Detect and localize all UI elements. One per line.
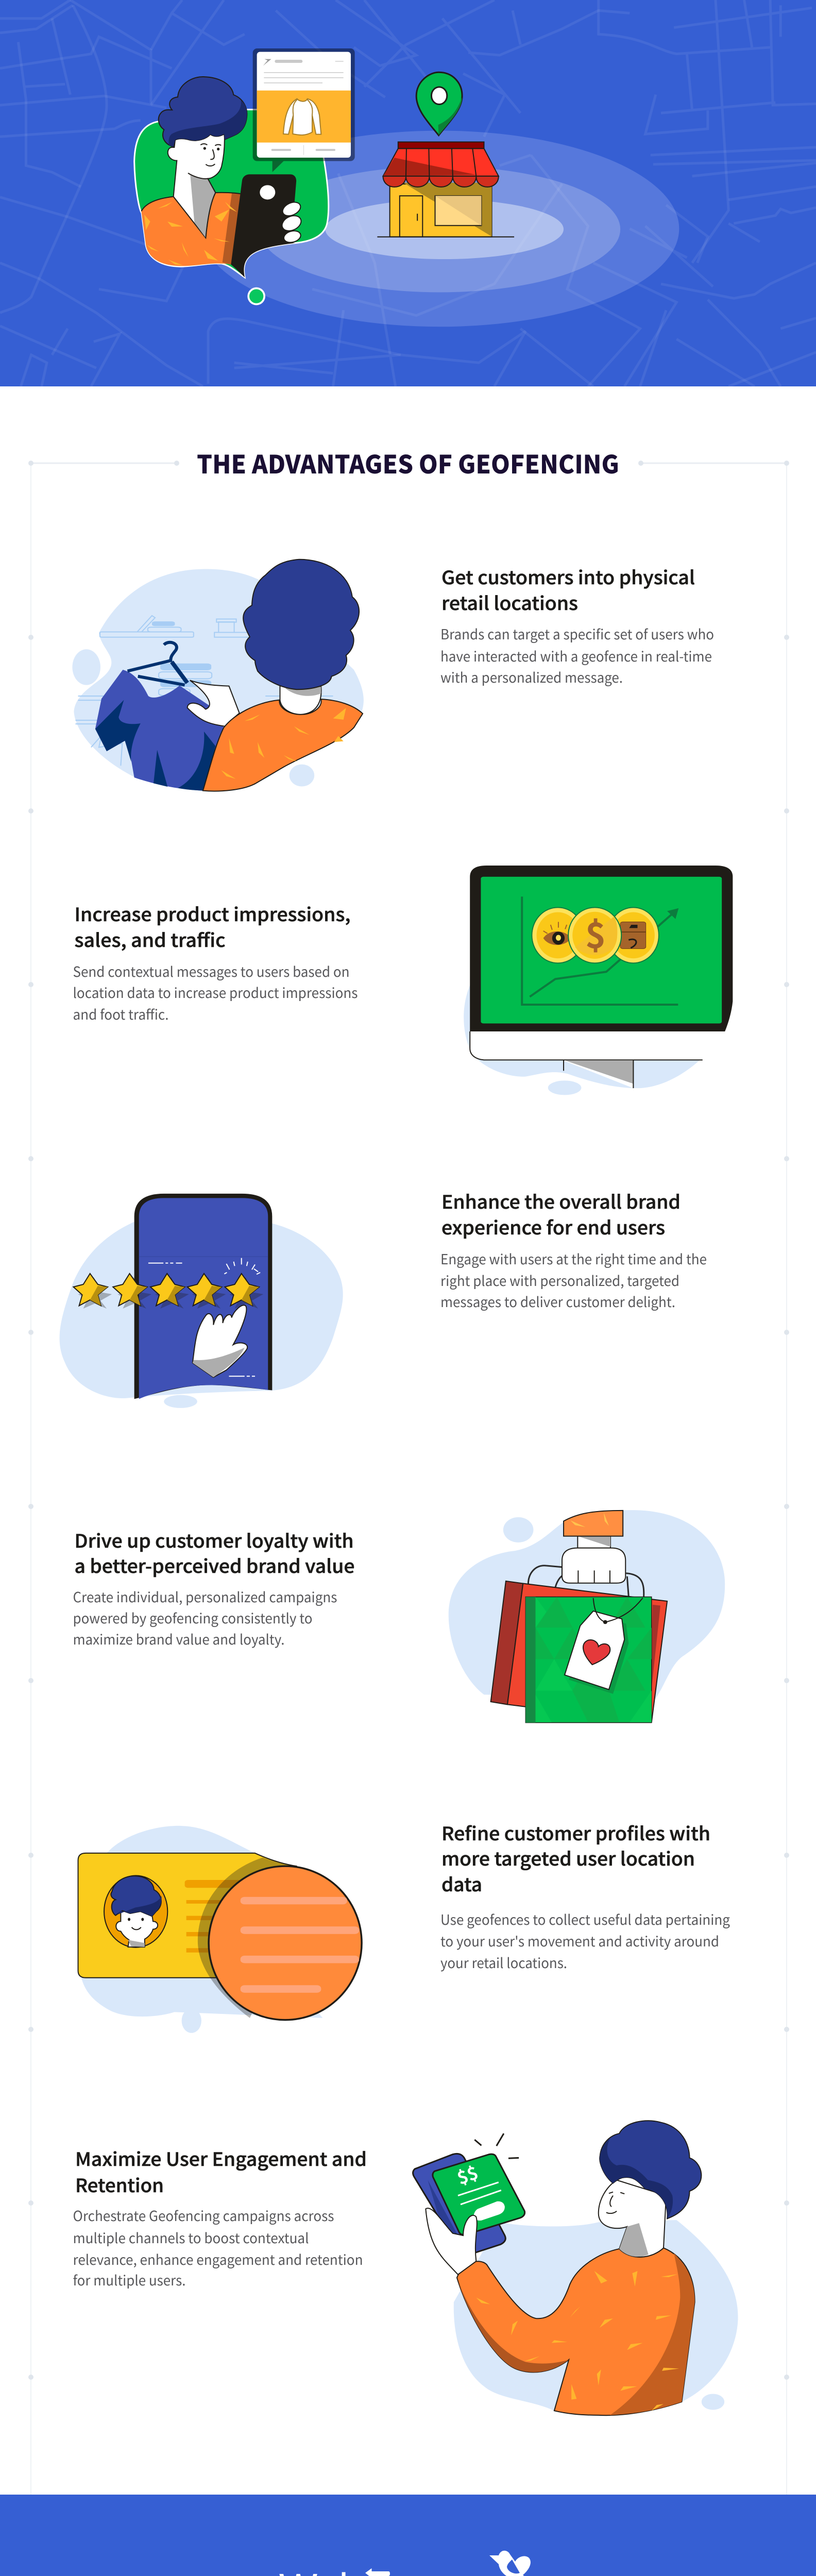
text block: section 3: messages to deliver customer delight. <box>440 1291 675 1311</box>
text block: section 4: a better-perceived brand value <box>74 1552 354 1579</box>
hand holding hanger <box>188 680 240 726</box>
text block: section 6: relevance, enhance engagement and retention <box>73 2249 363 2269</box>
magnifier <box>198 1857 362 2020</box>
icon: location dot <box>247 287 265 305</box>
illustration: person in speech bubble with message card <box>134 48 355 305</box>
text block: section 2: location data to increase product impressions <box>73 982 358 1002</box>
shirt <box>141 193 241 266</box>
monitor body <box>470 866 733 1088</box>
id card <box>78 1853 297 1978</box>
alert ticks <box>474 2133 519 2158</box>
text block: section 4: Drive up customer loyalty with <box>74 1527 353 1553</box>
text block: section 5 <box>440 1819 730 1972</box>
phone in hand <box>231 174 303 277</box>
illustration: store <box>377 142 514 237</box>
text block: section 6: multiple channels to boost contextual <box>73 2227 309 2247</box>
pointing hand <box>193 1305 247 1377</box>
background blob <box>454 2220 738 2411</box>
text block: section 3: experience for end users <box>441 1213 665 1240</box>
neck and face <box>599 2180 666 2257</box>
text block: section 1: Get customers into physical <box>441 563 695 590</box>
text block: section 6: for multiple users. <box>73 2269 185 2290</box>
text block: section 3: Engage with users at the right time and the <box>440 1248 707 1268</box>
hanging shirt <box>95 642 224 791</box>
panel: section 4 illustration shopping bags <box>449 1510 725 1723</box>
dollar label on phone: $$ <box>453 2159 481 2190</box>
text block: section 1: retail locations <box>441 589 578 616</box>
text block: section 4: powered by geofencing consistently to <box>73 1607 312 1628</box>
icon: long-sleeve top <box>283 99 321 135</box>
green bubble <box>134 109 329 277</box>
orange back <box>203 699 363 791</box>
text block: section 5: your retail locations. <box>440 1952 567 1972</box>
text block: section 2: Send contextual messages to users based on <box>73 961 349 981</box>
coin: dollar <box>568 907 621 963</box>
coins <box>532 907 659 963</box>
neck and face <box>168 134 225 238</box>
panel: section 3 illustration rating phone <box>60 1194 343 1408</box>
heart tag <box>565 1598 643 1694</box>
text block: section 3: right place with personalized, targeted <box>440 1270 679 1290</box>
panel frame with connector nodes <box>28 461 789 2495</box>
text block: section 1: Brands can target a specific set of users who <box>440 623 714 643</box>
five stars <box>73 1274 259 1306</box>
illustration: geofence scene with store <box>0 0 816 386</box>
icon: logo bird <box>489 2551 533 2576</box>
text block: section 1 <box>440 563 714 687</box>
text block: section 1: have interacted with a geofence in real-time <box>440 646 712 666</box>
icon: map pin <box>416 72 462 135</box>
panel: section 1 illustration shopper <box>72 560 364 791</box>
phone <box>134 1194 272 1399</box>
background blob <box>60 1208 343 1408</box>
message card mockup <box>253 48 355 172</box>
text block: section 2 <box>73 900 358 1024</box>
text block: section 5: Use geofences to collect useful data pertaining <box>440 1909 730 1929</box>
logo <box>279 2551 533 2576</box>
text block: section 1: with a personalized message. <box>440 667 623 687</box>
neck <box>280 686 321 715</box>
panel: section 5 illustration id card and magnifier <box>78 1826 362 2033</box>
handles <box>528 1566 644 1597</box>
text block: section 3 <box>440 1188 707 1311</box>
text block: section 2: and foot traffic. <box>73 1004 169 1024</box>
background blob <box>72 569 364 791</box>
panel: section 2 illustration monitor <box>464 866 733 1095</box>
geofence rings <box>200 131 679 327</box>
coin: box <box>608 907 659 963</box>
hand and sleeve <box>562 1511 625 1583</box>
text block: section 5: Refine customer profiles with <box>441 1819 710 1846</box>
background blob <box>81 1826 322 2033</box>
panel: footer <box>0 2495 816 2576</box>
panel: section 6 illustration person with phone <box>413 2121 738 2415</box>
sparkle <box>224 1258 260 1274</box>
text block: section 6 <box>73 2145 367 2290</box>
text block: section 5: data <box>441 1870 482 1897</box>
hand <box>426 2208 477 2275</box>
text block: section 6: Maximize User Engagement and <box>75 2145 367 2172</box>
panel: header hero <box>0 0 816 386</box>
text block: section 3: Enhance the overall brand <box>441 1188 681 1214</box>
icon: logo arrows <box>365 2568 390 2576</box>
title: THE ADVANTAGES OF GEOFENCING <box>197 445 619 481</box>
background blob <box>449 1510 725 1699</box>
icon label: dollar sign: $ <box>585 907 606 958</box>
text block: section 5: to your user's movement and activity around <box>440 1930 719 1951</box>
rising line chart <box>522 896 678 1005</box>
text block: section 4: maximize brand value and loyalty. <box>73 1629 284 1649</box>
text block: section 2: Increase product impressions, <box>74 900 350 927</box>
text block: section 6: Retention <box>75 2171 164 2198</box>
text block: section 4: Create individual, personalized campaigns <box>73 1586 337 1606</box>
avatar <box>104 1876 167 1947</box>
text block: section 4 <box>73 1527 354 1649</box>
phones <box>413 2154 525 2252</box>
text block: section 5: more targeted user location <box>441 1844 695 1871</box>
shelves <box>75 616 333 766</box>
text block: section 2: sales, and traffic <box>74 926 226 953</box>
star shadows <box>78 1277 263 1309</box>
hair <box>159 77 247 147</box>
background blob <box>464 956 731 1095</box>
hair from behind <box>243 560 359 689</box>
sweater <box>457 2248 695 2415</box>
coin: eye <box>532 907 584 963</box>
text block: section 6: Orchestrate Geofencing campaigns across <box>73 2205 334 2225</box>
green bag <box>525 1597 652 1723</box>
hair <box>600 2121 701 2218</box>
red bag <box>491 1581 667 1722</box>
